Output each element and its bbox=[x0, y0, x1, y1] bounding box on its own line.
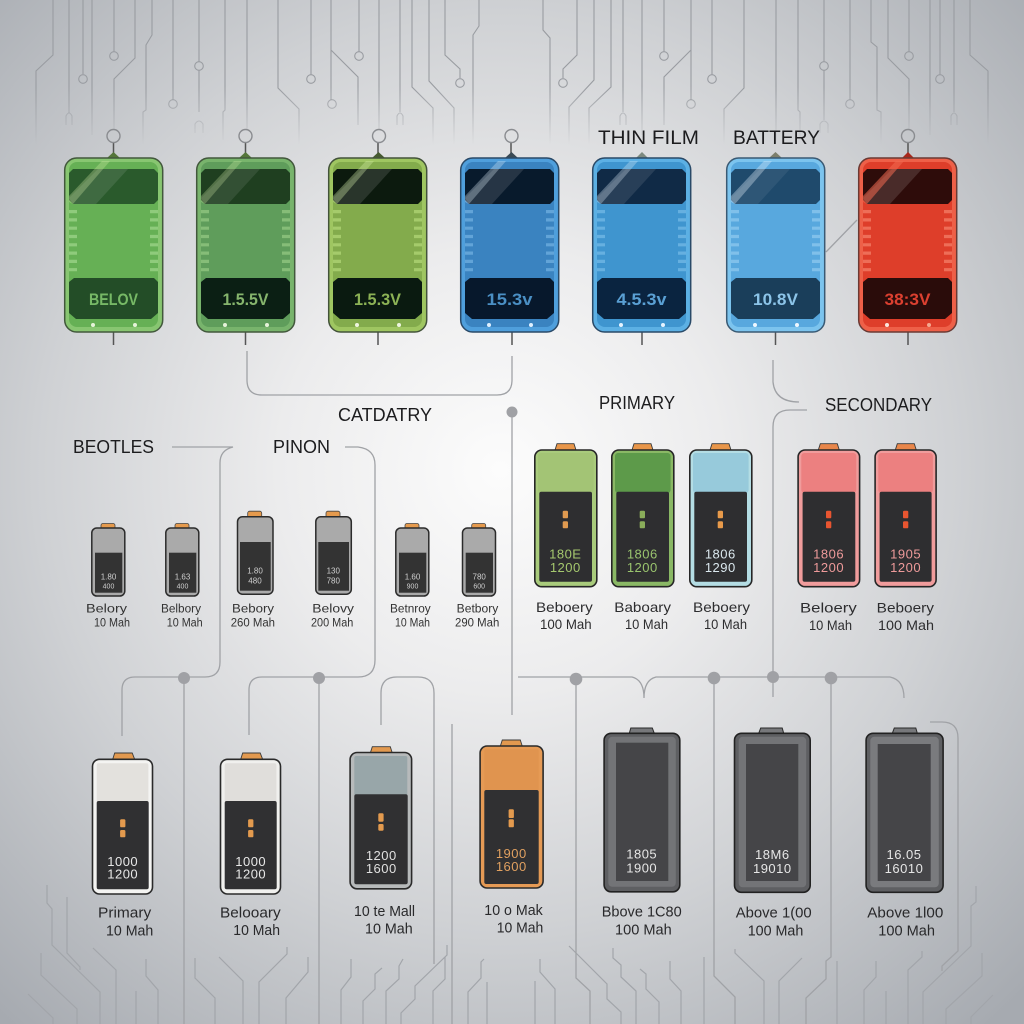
secondary battery 1 label bbox=[800, 600, 857, 633]
bottom battery 1 label: 10 Mah bbox=[106, 922, 153, 939]
bottom battery 4 label: 10 Mah bbox=[497, 920, 543, 937]
primary battery 3 label: 10 Mah bbox=[704, 616, 747, 632]
bottom battery 3 label: 10 te Mall bbox=[354, 903, 415, 920]
small battery 1 label: 10 Mah bbox=[94, 618, 130, 630]
top battery 4: deep blue bbox=[461, 130, 559, 345]
small battery 2 label: Belbory bbox=[161, 604, 201, 616]
bottom battery 6: dark grey bbox=[734, 728, 810, 892]
voltage readout: 1.5.3V bbox=[354, 290, 402, 309]
heading: thin film: THIN FILM bbox=[598, 127, 699, 149]
small battery 1 label: Belory bbox=[86, 604, 127, 616]
primary battery 2 label: Baboary bbox=[614, 599, 671, 615]
primary battery 3 label: Beboery bbox=[693, 599, 750, 615]
small battery 2 label: 10 Mah bbox=[167, 618, 203, 630]
small battery 2: 400 bbox=[177, 584, 188, 590]
top battery 1: green bbox=[65, 130, 163, 345]
top battery 7: red bbox=[859, 130, 957, 345]
secondary battery 1: red: 1806 bbox=[813, 546, 844, 562]
small battery 4 tall bbox=[316, 511, 351, 594]
voltage readout: BELOV bbox=[89, 290, 139, 309]
small battery 4 label bbox=[311, 604, 354, 630]
heading: primary: PRIMARY bbox=[599, 393, 675, 413]
bottom battery 7 label: Above 1l00 bbox=[867, 905, 943, 922]
small battery 3 label: 260 Mah bbox=[231, 618, 275, 630]
bottom battery 2: white: 1200 bbox=[235, 866, 266, 881]
primary battery 3: light blue: 1290 bbox=[705, 560, 736, 575]
primary battery 2: green: 1806 bbox=[627, 546, 658, 562]
primary battery 3: light blue bbox=[690, 444, 752, 587]
small battery 5: 900 bbox=[407, 584, 418, 590]
bottom battery 6: dark grey: 18M6 bbox=[755, 847, 790, 862]
small battery 4 label: 200 Mah bbox=[311, 618, 353, 630]
heading: catdatry: CATDATRY bbox=[338, 405, 432, 425]
voltage readout: 1.5.5V bbox=[222, 290, 269, 309]
connector node dots bbox=[178, 406, 837, 685]
small battery 5 label: Betnroy bbox=[390, 604, 431, 616]
small battery 6: 600 bbox=[473, 584, 485, 590]
bottom battery 2: white bbox=[220, 753, 280, 894]
bottom battery 4 label bbox=[484, 902, 543, 937]
bottom battery 7 label: 100 Mah bbox=[878, 923, 935, 940]
bottom battery 6 label: Above 1(00 bbox=[736, 905, 812, 922]
small battery 1 bbox=[92, 524, 125, 596]
top circuit traces bbox=[36, 0, 988, 150]
secondary battery 2: red: 1200 bbox=[890, 560, 921, 575]
connector lines bbox=[122, 220, 958, 1024]
bottom battery 5: dark grey bbox=[604, 728, 680, 892]
bottom battery 6: dark grey: 19010 bbox=[753, 861, 792, 876]
small battery 2 bbox=[166, 524, 199, 596]
voltage readout: 38:3V bbox=[884, 290, 931, 309]
bottom battery 7 label bbox=[867, 905, 943, 940]
primary battery 1 label: 100 Mah bbox=[540, 616, 592, 632]
bottom battery 4: orange: 1600 bbox=[496, 859, 527, 874]
bottom battery 6 label: 100 Mah bbox=[748, 923, 803, 940]
small battery 6: 780 bbox=[473, 572, 486, 582]
secondary battery 2: red bbox=[875, 444, 936, 587]
bottom battery 7: dark grey bbox=[866, 728, 943, 892]
small battery 2: 1.63 bbox=[175, 572, 191, 582]
bottom battery 5 label bbox=[602, 904, 682, 938]
small battery 3 tall: 1.80 bbox=[247, 567, 263, 576]
bottom battery 3 label bbox=[354, 903, 415, 937]
small battery 3 tall: 480 bbox=[248, 577, 262, 586]
bottom battery 4: orange: 1900 bbox=[496, 846, 527, 861]
small battery 1: 400 bbox=[103, 584, 114, 590]
secondary battery 2 label: 100 Mah bbox=[878, 617, 934, 633]
small battery 5: 1.60 bbox=[405, 572, 421, 582]
secondary battery 2 label bbox=[877, 600, 934, 633]
bottom circuit traces bbox=[28, 885, 993, 1024]
heading: battery: BATTERY bbox=[733, 127, 820, 149]
heading: pinon: PINON bbox=[273, 437, 330, 457]
top battery 6: light blue bbox=[727, 152, 825, 345]
small battery 4 label: Belovy bbox=[312, 604, 354, 616]
bottom battery 2 label: 10 Mah bbox=[233, 922, 280, 939]
secondary battery 1: red: 1200 bbox=[813, 560, 844, 575]
bottom battery 2 label: Belooary bbox=[220, 904, 281, 921]
small battery 1 label bbox=[86, 604, 130, 630]
secondary battery 1: red bbox=[798, 444, 860, 587]
small battery 3 label: Bebory bbox=[232, 604, 274, 616]
heading: beotles: BEOTLES bbox=[73, 437, 154, 457]
voltage readout: 10.8V bbox=[753, 290, 799, 309]
small battery 6 label bbox=[455, 604, 499, 630]
small battery 5 label: 10 Mah bbox=[395, 618, 430, 630]
small battery 5 bbox=[396, 524, 429, 596]
bottom battery 1 label bbox=[98, 904, 153, 939]
small battery 3 tall bbox=[238, 511, 273, 594]
top battery 2: muted green bbox=[197, 130, 295, 345]
primary battery 2 label: 10 Mah bbox=[625, 616, 668, 632]
small battery 6 label: Betbory bbox=[457, 604, 499, 616]
secondary battery 1 label: 10 Mah bbox=[809, 617, 852, 633]
bottom battery 3: slate: 1200 bbox=[366, 848, 397, 863]
bottom battery 3: slate bbox=[350, 747, 412, 889]
bottom battery 5: dark grey: 1805 bbox=[626, 846, 657, 861]
bottom battery 5 label: Bbove 1C80 bbox=[602, 904, 682, 921]
small battery 5 label bbox=[390, 604, 431, 630]
bottom battery 2 label bbox=[220, 904, 281, 939]
small battery 6 label: 290 Mah bbox=[455, 618, 499, 630]
primary battery 2 label bbox=[614, 599, 671, 632]
voltage readout: 15.3v bbox=[486, 290, 533, 309]
primary battery 1: light green: 1200 bbox=[550, 560, 581, 575]
bottom battery 1: white bbox=[92, 753, 152, 894]
primary battery 2: green bbox=[612, 444, 674, 587]
secondary battery 2: red: 1905 bbox=[890, 546, 921, 562]
secondary battery 2 label: Beboery bbox=[877, 600, 934, 616]
bottom battery 5: dark grey: 1900 bbox=[626, 860, 657, 875]
small battery 4 tall: 780 bbox=[327, 577, 341, 586]
small battery 4 tall: 130 bbox=[327, 567, 341, 576]
bottom battery 6 label bbox=[736, 905, 812, 940]
bottom battery 1: white: 1200 bbox=[107, 866, 138, 881]
voltage readout: 4.5.3v bbox=[616, 290, 667, 309]
bottom battery 2: white: 1000 bbox=[235, 854, 266, 869]
small battery 2 label bbox=[161, 604, 203, 630]
secondary battery 1 label: Beloery bbox=[800, 600, 857, 616]
bottom battery 1: white: 1000 bbox=[107, 854, 138, 869]
top battery 5: blue bbox=[593, 152, 691, 345]
small battery 6 bbox=[462, 524, 496, 596]
primary battery 1: light green bbox=[535, 444, 597, 587]
primary battery 2: green: 1200 bbox=[627, 560, 658, 575]
primary battery 3 label bbox=[693, 599, 750, 632]
small battery 3 label bbox=[231, 604, 275, 630]
top battery 3: olive green bbox=[329, 130, 427, 345]
bottom battery 7: dark grey: 16010 bbox=[885, 861, 923, 876]
bottom battery 4: orange bbox=[480, 740, 543, 888]
bottom battery 4 label: 10 o Mak bbox=[484, 902, 543, 919]
small battery 1: 1.80 bbox=[101, 572, 117, 582]
bottom battery 3: slate: 1600 bbox=[366, 861, 397, 876]
primary battery 1 label: Beboery bbox=[536, 599, 593, 615]
bottom battery 7: dark grey: 16.05 bbox=[886, 847, 922, 862]
heading: secondary: SECONDARY bbox=[825, 395, 932, 415]
primary battery 1: light green: 180E bbox=[549, 546, 581, 562]
bottom battery 3 label: 10 Mah bbox=[365, 920, 413, 937]
primary battery 1 label bbox=[536, 599, 593, 632]
primary battery 3: light blue: 1806 bbox=[705, 546, 736, 562]
bottom battery 1 label: Primary bbox=[98, 904, 152, 921]
bottom battery 5 label: 100 Mah bbox=[615, 921, 672, 938]
